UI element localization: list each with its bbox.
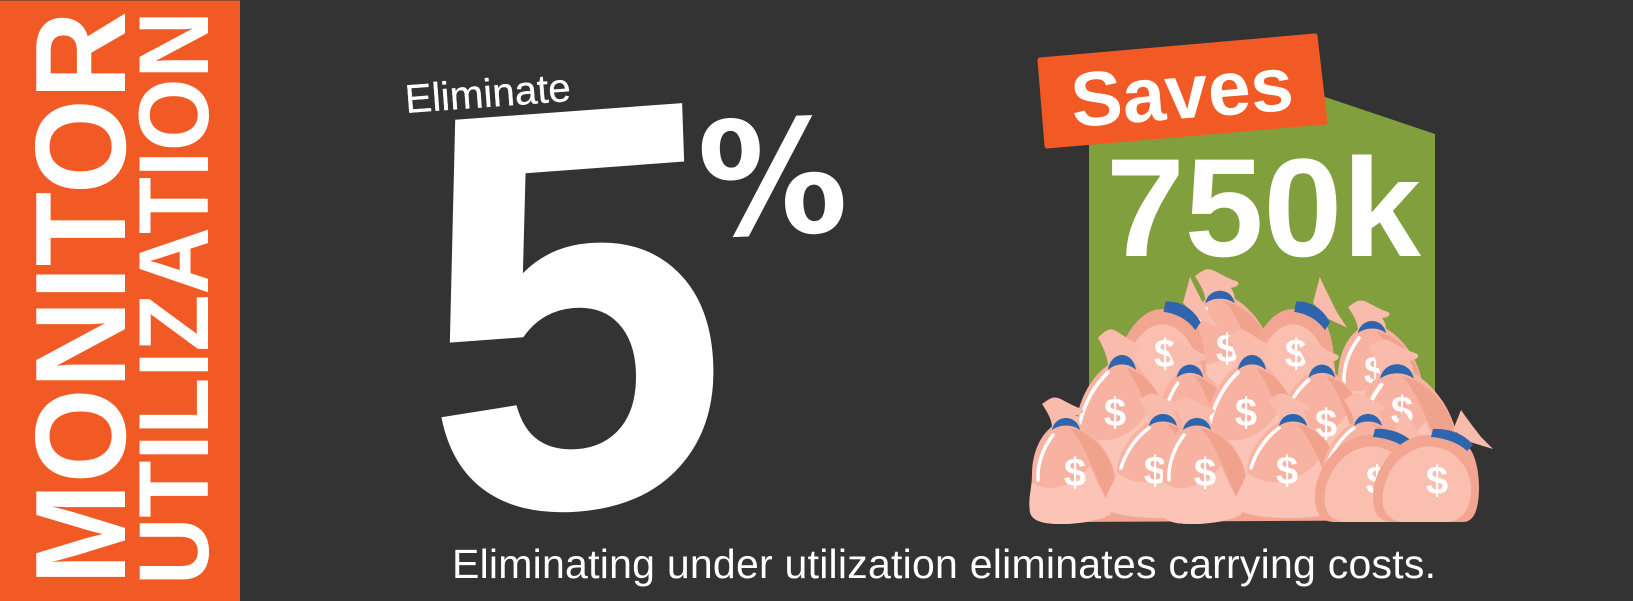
badge: Saves (1040, 36, 1325, 146)
label: Eliminate: Eliminate (403, 66, 572, 122)
back row bags (1113, 269, 1422, 427)
percent sign: % (695, 86, 850, 274)
panel: green savings shape (1089, 97, 1435, 440)
solid base behind pile (1060, 445, 1470, 522)
front row bags (1029, 393, 1493, 524)
badge text: Saves (1068, 41, 1296, 144)
back row bags: $ (1216, 327, 1238, 371)
back row bags: $ (1285, 332, 1307, 376)
back row bags: $ (1154, 332, 1176, 376)
front row bags: $ (1366, 459, 1388, 503)
middle row bags (1064, 329, 1457, 491)
middle row bags: $ (1235, 391, 1257, 435)
back row bags: $ (1364, 349, 1386, 393)
front row bags: $ (1064, 451, 1086, 495)
middle row bags: $ (1315, 402, 1337, 446)
panel: orange title sidebar (0, 0, 240, 601)
icon: pile of money bags (1029, 269, 1493, 524)
front row bags: $ (1144, 449, 1166, 493)
front row bags: $ (1276, 449, 1298, 493)
middle row bags: $ (1391, 389, 1413, 433)
front row bags: $ (1194, 451, 1216, 495)
front row bags: $ (1426, 459, 1448, 503)
middle row bags: $ (1104, 391, 1126, 435)
savings amount: 750k (1106, 129, 1421, 286)
caption: Eliminating under utilization eliminates carrying costs. (452, 541, 1436, 587)
